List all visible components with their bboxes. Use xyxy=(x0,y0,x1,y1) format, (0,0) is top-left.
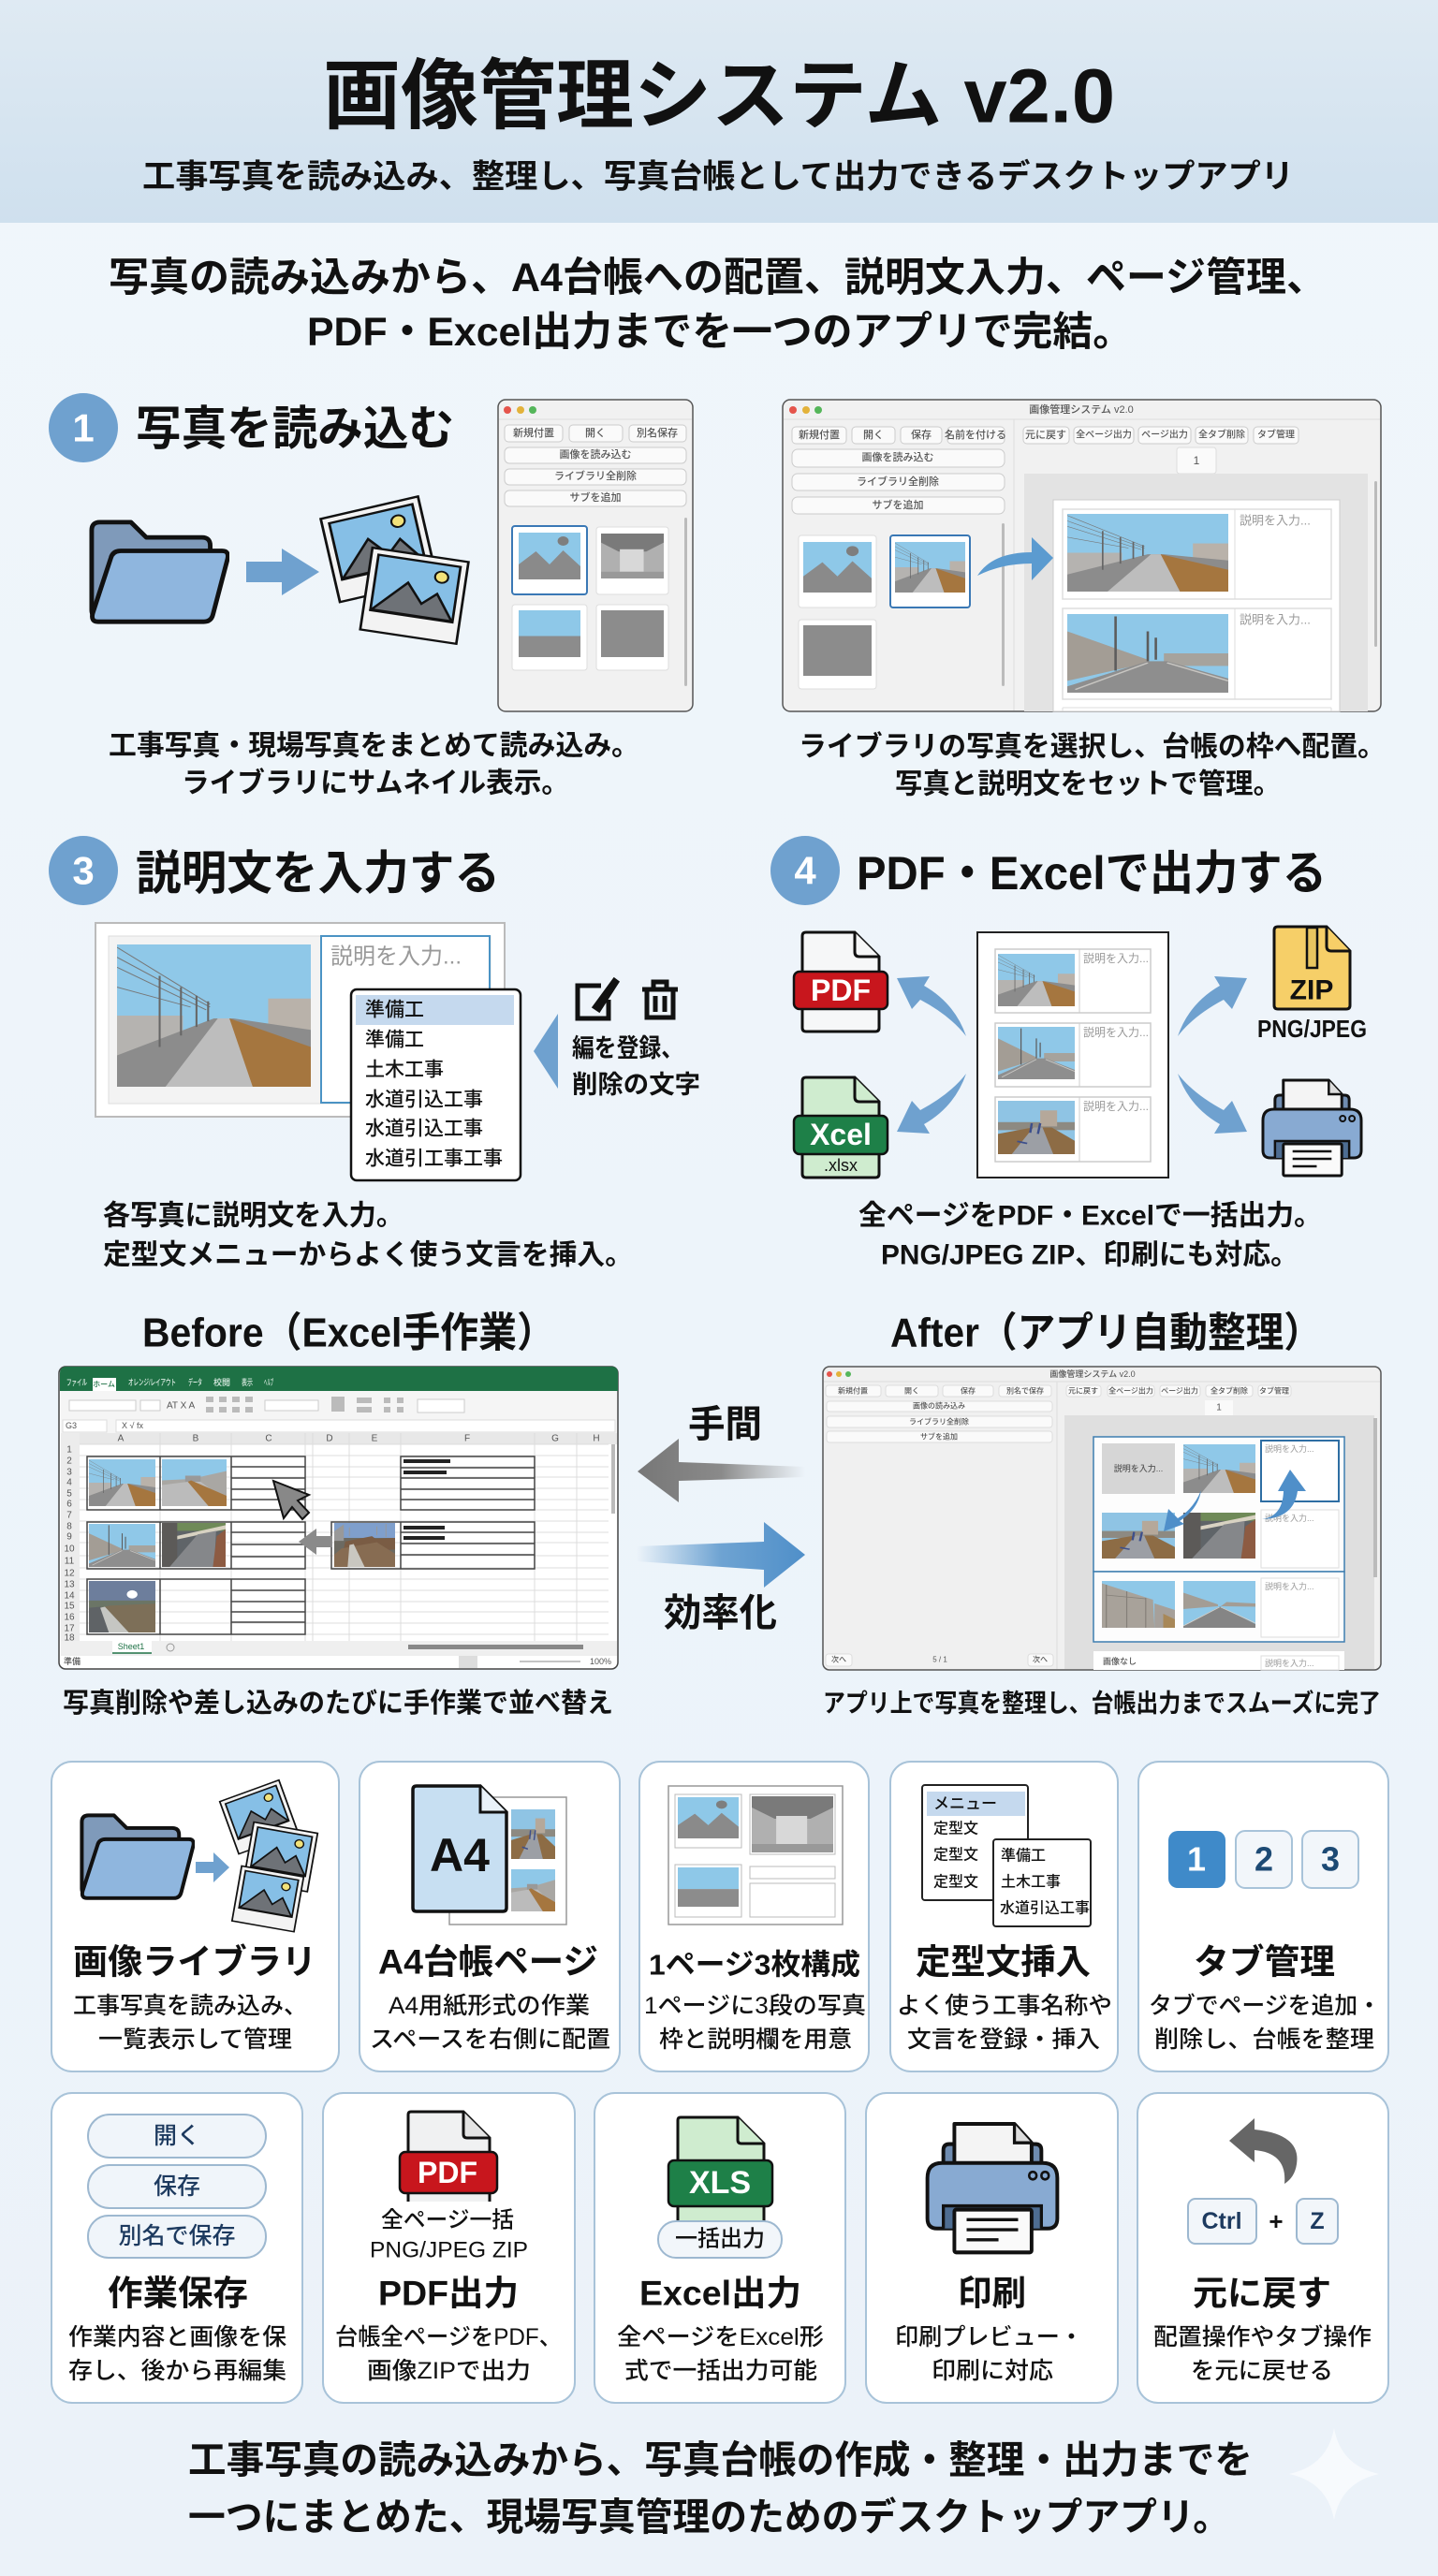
icon: printer xyxy=(928,2124,1057,2252)
app window: library: サブを追加 xyxy=(569,490,622,504)
footer text: 一つにまとめた、現場写真管理のためのデスクトップアプリ。 xyxy=(188,2496,1230,2539)
arrow: insert photo xyxy=(299,1529,332,1555)
icon: folder and photos xyxy=(81,1780,317,1932)
ledger page: 説明を入力... xyxy=(1083,951,1149,965)
step 1 section xyxy=(49,393,693,799)
After app window: 画像管理システム v2.0 xyxy=(1049,1368,1136,1379)
card: tab management: タブでページを追加・ xyxy=(1149,1993,1381,2019)
step 4 heading: PDF・Excelで出力する xyxy=(857,847,1327,900)
After heading: After（アプリ自動整理） xyxy=(890,1310,1322,1355)
Excel window mockup: 1 xyxy=(66,1445,72,1455)
card: A4 ledger page: スペースを右側に配置 xyxy=(370,2027,610,2053)
After app window: 説明を入力... xyxy=(1114,1463,1163,1473)
icon: numbered tabs: 2 xyxy=(1255,1840,1273,1878)
icon: A4 page: A4 xyxy=(430,1829,490,1881)
card: undo xyxy=(1137,2093,1388,2403)
card: phrase insert: 定型文挿入 xyxy=(916,1943,1091,1981)
card: phrase insert xyxy=(890,1762,1118,2071)
card: three per page: 枠と説明欄を用意 xyxy=(659,2027,852,2053)
icon: save buttons: 別名で保存 xyxy=(118,2223,236,2249)
Excel window mockup: オレンジ/レイアウト xyxy=(128,1378,176,1387)
step 4 badge xyxy=(770,836,840,905)
ledger row mockup: 説明を入力... xyxy=(330,944,462,970)
Excel window mockup: 11 xyxy=(65,1556,75,1567)
icon: XLS xyxy=(658,2117,782,2258)
arrow: folder to photos xyxy=(246,549,319,595)
card: tab management: 削除し、台帳を整理 xyxy=(1154,2027,1374,2053)
Excel window mockup: 9 xyxy=(66,1531,72,1543)
arrow: library to ledger xyxy=(977,537,1053,580)
Excel window mockup: F xyxy=(464,1434,470,1443)
icon: PDF xyxy=(400,2112,497,2202)
icon: menus: 準備工 xyxy=(1001,1848,1046,1865)
Excel window mockup: 15 xyxy=(64,1601,75,1612)
step 3 caption xyxy=(103,1200,633,1271)
edit note xyxy=(572,1034,700,1099)
step 1 badge: 1 xyxy=(72,406,95,449)
Excel window mockup: ヘルプ xyxy=(264,1378,273,1387)
icon: XLS: XLS xyxy=(689,2165,751,2201)
card: phrase insert: 文言を登録・挿入 xyxy=(907,2027,1100,2053)
icon: XLS: 一括出力 xyxy=(675,2226,765,2252)
After app window: 開く xyxy=(904,1387,919,1395)
Excel window mockup: A xyxy=(118,1434,125,1443)
icon: cursor xyxy=(273,1481,309,1519)
Before heading: Before（Excel手作業） xyxy=(142,1310,555,1355)
icon: Excel file: Xcel xyxy=(810,1118,872,1151)
step 1 heading: 写真を読み込む xyxy=(136,402,454,455)
After app window: 説明を入力... xyxy=(1265,1443,1314,1454)
PNG/JPEG label: PNG/JPEG xyxy=(1257,1015,1367,1043)
edit note: 編を登録、 xyxy=(572,1034,683,1062)
step 2 caption: 写真と説明文をセットで管理。 xyxy=(895,769,1281,799)
ledger page xyxy=(977,932,1168,1178)
card: Excel output xyxy=(594,2093,845,2403)
Excel window mockup: 2 xyxy=(66,1456,72,1466)
Excel window mockup: 14 xyxy=(64,1591,75,1601)
icon: save buttons xyxy=(88,2115,266,2258)
step 1 caption: ライブラリにサムネイル表示。 xyxy=(182,768,569,799)
card: print: 印刷 xyxy=(958,2275,1026,2312)
icon: numbered tabs xyxy=(1168,1831,1358,1888)
Excel window mockup: 6 xyxy=(66,1500,72,1509)
icon: menus: 定型文 xyxy=(933,1846,978,1863)
step 2 app window: ledger layout: 全タブ削除 xyxy=(1198,429,1245,440)
icon: printer xyxy=(1263,1080,1361,1176)
After app window: 説明を入力... xyxy=(1265,1658,1314,1668)
card: phrase insert: よく使う工事名称や xyxy=(897,1993,1112,2019)
app window: library: 画像を読み込む xyxy=(560,447,631,461)
keys: Ctrl + Z xyxy=(1188,2199,1338,2244)
Excel window mockup: 17 xyxy=(64,1623,75,1634)
Excel window mockup: 5 xyxy=(66,1488,72,1500)
icon: menus: 定型文 xyxy=(933,1820,978,1837)
card: Excel output: 式で一括出力可能 xyxy=(624,2358,817,2384)
card: image library: 工事写真を読み込み、 xyxy=(73,1993,307,2019)
After app window: 1 xyxy=(1216,1402,1222,1413)
After app window: 元に戻す xyxy=(1068,1387,1098,1395)
After app window: 説明を入力... xyxy=(1265,1581,1314,1591)
Excel window mockup: 10 xyxy=(64,1544,75,1554)
Excel window mockup: D xyxy=(326,1434,333,1443)
card: undo: 配置操作やタブ操作 xyxy=(1153,2324,1372,2350)
Excel window mockup: G3 xyxy=(66,1421,77,1430)
After app window: 説明を入力... xyxy=(1265,1513,1314,1523)
After app window: サブを追加 xyxy=(920,1432,958,1442)
icon: page layout xyxy=(668,1786,843,1925)
icon: numbered tabs: 1 xyxy=(1187,1840,1206,1878)
Excel window mockup: ホーム xyxy=(93,1380,115,1389)
card: undo: を元に戻せる xyxy=(1191,2358,1333,2384)
app window: library xyxy=(498,400,693,711)
step 3 caption: 定型文メニューからよく使う文言を挿入。 xyxy=(103,1239,633,1271)
step 3 section xyxy=(49,836,700,1271)
dropdown menu of phrases: 準備工 xyxy=(365,1030,424,1050)
icon: PDF file xyxy=(794,932,888,1032)
After app window: 次へ xyxy=(1033,1655,1048,1664)
icon: menus: メニュー xyxy=(933,1795,997,1812)
After app window: 5 / 1 xyxy=(932,1655,947,1664)
After app window: 保存 xyxy=(961,1385,976,1395)
card: A4 ledger page: A4台帳ページ xyxy=(378,1943,598,1981)
step 2 app window: ledger layout: 保存 xyxy=(911,428,932,441)
step 2 app window: ledger layout: 新規付置 xyxy=(799,428,840,441)
keys: Ctrl + Z: Z xyxy=(1310,2208,1325,2234)
step 2 app window: ledger layout xyxy=(783,400,1381,711)
step 2 app window: ledger layout: 画像管理システム v2.0 xyxy=(1029,402,1134,416)
ledger page: 説明を入力... xyxy=(1083,1099,1149,1113)
icon: menus: 定型文 xyxy=(933,1874,978,1891)
icon: save buttons: 保存 xyxy=(154,2174,200,2200)
header band xyxy=(0,0,1438,223)
intro text: 写真の読み込みから、A4台帳への配置、説明文入力、ページ管理、 xyxy=(109,256,1327,300)
icon: ZIP file: ZIP xyxy=(1290,975,1333,1005)
card: three per page xyxy=(639,1762,869,2071)
arrow: to menu xyxy=(534,1014,558,1089)
arrow: efficiency xyxy=(637,1522,805,1588)
After app window: タブ管理 xyxy=(1259,1385,1289,1395)
icon: trash xyxy=(642,982,678,1017)
edit note: 削除の文字 xyxy=(572,1071,700,1099)
label: efficiency: 効率化 xyxy=(664,1591,777,1634)
icon: photos xyxy=(321,496,468,644)
step 1 caption xyxy=(109,730,639,799)
card: A4 ledger page xyxy=(360,1762,620,2071)
Excel window mockup: 準備 xyxy=(64,1656,81,1666)
icon: Excel file: .xlsx xyxy=(824,1156,858,1175)
app window: library: 開く xyxy=(585,427,606,439)
step 4 caption: 全ページをPDF・Excelで一括出力。 xyxy=(858,1200,1322,1232)
step 2 app window: ledger layout: 1 xyxy=(1194,454,1200,467)
step 2 app window: ledger layout: 元に戻す xyxy=(1025,429,1066,441)
step 2 app window: ledger layout: 開く xyxy=(863,429,884,441)
step 3 heading: 説明文を入力する xyxy=(136,847,500,900)
After app window: 次へ xyxy=(831,1655,846,1664)
Excel window mockup: 3 xyxy=(66,1468,72,1477)
ledger row mockup xyxy=(95,923,505,1117)
card: Excel output: Excel出力 xyxy=(639,2275,801,2312)
Excel window mockup: 100% xyxy=(590,1657,611,1666)
card: image library xyxy=(51,1762,339,2071)
sparkle decoration xyxy=(1289,2428,1379,2520)
step 2 app window: ledger layout: 名前を付ける xyxy=(945,428,1006,441)
intro text xyxy=(109,256,1327,355)
Excel window mockup: 表示 xyxy=(242,1377,253,1387)
card: PDF output: PNG/JPEG ZIP xyxy=(370,2237,528,2263)
step 4 section xyxy=(770,836,1367,1271)
step 4 badge: 4 xyxy=(794,848,816,893)
Excel window mockup: Sheet1 xyxy=(118,1642,144,1651)
card: three per page: 1ページに3段の写真 xyxy=(644,1993,866,2019)
card: print: 印刷プレビュー・ xyxy=(895,2324,1083,2350)
icon: edit xyxy=(578,979,618,1018)
step 4 caption: PNG/JPEG ZIP、印刷にも対応。 xyxy=(881,1239,1299,1271)
footer text: 工事写真の読み込みから、写真台帳の作成・整理・出力までを xyxy=(188,2438,1253,2481)
After caption: アプリ上で写真を整理し、台帳出力までスムーズに完了 xyxy=(823,1689,1381,1718)
After app window: 画像なし xyxy=(1103,1656,1137,1666)
Excel window mockup xyxy=(59,1367,618,1669)
card: A4 ledger page: A4用紙形式の作業 xyxy=(389,1993,590,2019)
step 2 caption xyxy=(799,730,1386,799)
icon: folder xyxy=(92,522,227,622)
step 3 badge xyxy=(49,836,118,905)
Excel window mockup: 18 xyxy=(64,1632,75,1644)
card: PDF output: 全ページ一括 xyxy=(381,2207,514,2233)
Excel window mockup: データ xyxy=(188,1377,202,1387)
arrows: rearrange photos xyxy=(1164,1470,1306,1531)
footer text xyxy=(188,2438,1253,2539)
dropdown menu of phrases: 土木工事 xyxy=(365,1060,444,1080)
title: 画像管理システム v2.0 xyxy=(323,54,1115,139)
Excel window mockup: X √ fx xyxy=(122,1421,143,1430)
After app window: 画像の読み込み xyxy=(913,1400,965,1410)
dropdown menu of phrases: 準備工 xyxy=(365,1000,424,1020)
After app window: 全タブ削除 xyxy=(1211,1385,1248,1395)
Excel window mockup: 8 xyxy=(66,1522,72,1531)
icon: save buttons: 開く xyxy=(154,2123,200,2149)
card: three per page: 1ページ3枚構成 xyxy=(649,1949,860,1981)
Excel window mockup: 校閲 xyxy=(213,1377,230,1387)
intro text: PDF・Excel出力までを一つのアプリで完結。 xyxy=(307,310,1133,355)
step 1 caption: 工事写真・現場写真をまとめて読み込み。 xyxy=(109,730,639,762)
Excel window mockup: 4 xyxy=(66,1477,72,1488)
step 1 badge xyxy=(49,393,118,462)
card: save work: 存し、後から再編集 xyxy=(68,2358,286,2384)
card: PDF output: PDF出力 xyxy=(378,2275,519,2312)
step 3 badge: 3 xyxy=(72,848,95,893)
After app window xyxy=(823,1367,1381,1670)
keys: Ctrl + Z: + xyxy=(1269,2207,1284,2235)
dropdown menu of phrases: 水道引工事工事 xyxy=(365,1148,503,1170)
dropdown menu of phrases xyxy=(351,989,521,1180)
label: manual effort: 手間 xyxy=(688,1404,762,1445)
card: PDF output: 台帳全ページをPDF、 xyxy=(335,2324,562,2350)
Before caption: 写真削除や差し込みのたびに手作業で並べ替え xyxy=(63,1688,613,1719)
Excel window mockup: 7 xyxy=(66,1511,72,1520)
app window: library: ライブラリ全削除 xyxy=(554,469,637,482)
card: image library: 画像ライブラリ xyxy=(73,1941,316,1981)
step 2 app window: ledger layout: 説明を入力... xyxy=(1240,612,1311,627)
step 2 app window: ledger layout: タブ管理 xyxy=(1257,429,1295,440)
After app window: ページ出力 xyxy=(1161,1385,1198,1395)
ledger page: 説明を入力... xyxy=(1083,1025,1149,1039)
Excel window mockup: E xyxy=(372,1434,378,1443)
After app window: 新規付置 xyxy=(838,1385,868,1395)
step 2 app window: ledger layout: 画像を読み込む xyxy=(861,450,934,463)
arrow: manual effort xyxy=(638,1439,805,1502)
card: tab management: タブ管理 xyxy=(1194,1941,1335,1981)
Excel window mockup: 12 xyxy=(64,1569,75,1578)
Excel window mockup: ファイル xyxy=(66,1378,87,1387)
After app window: 別名で保存 xyxy=(1006,1385,1044,1395)
card: save work xyxy=(51,2093,302,2403)
Excel window mockup: 16 xyxy=(64,1612,75,1623)
app window: library: 別名保存 xyxy=(637,426,678,439)
app window: library: 新規付置 xyxy=(513,426,554,439)
icon: Excel file xyxy=(794,1077,888,1178)
step 2 app window: ledger layout: サブを追加 xyxy=(873,498,923,511)
Excel window mockup: B xyxy=(193,1434,199,1443)
subtitle: 工事写真を読み込み、整理し、写真台帳として出力できるデスクトップアプリ xyxy=(142,157,1294,195)
icon: menus: 水道引込工事 xyxy=(1000,1900,1090,1917)
icon: numbered tabs: 3 xyxy=(1321,1840,1340,1878)
step 2 app window: ledger layout: ライブラリ全削除 xyxy=(857,475,939,488)
step 4 caption xyxy=(858,1200,1322,1271)
step 2 app window: ledger layout: ページ出力 xyxy=(1141,429,1188,440)
Excel window mockup: C xyxy=(265,1434,272,1443)
icon: menus: 土木工事 xyxy=(1001,1874,1061,1891)
icon: PDF file: PDF xyxy=(811,973,871,1007)
arrows from ledger to outputs xyxy=(897,976,1247,1134)
dropdown menu of phrases: 水道引込工事 xyxy=(365,1118,483,1140)
card: PDF output: 画像ZIPで出力 xyxy=(367,2358,531,2384)
icon: A4 page xyxy=(413,1786,566,1925)
icon: PDF: PDF xyxy=(418,2156,477,2189)
step 2 app window: ledger layout: 説明を入力... xyxy=(1240,513,1311,528)
Excel window mockup: H xyxy=(593,1434,600,1443)
card: save work: 作業保存 xyxy=(108,2275,248,2312)
icon: ZIP file xyxy=(1274,927,1350,1009)
step 3 caption: 各写真に説明文を入力。 xyxy=(103,1200,404,1232)
step 2 caption: ライブラリの写真を選択し、台帳の枠へ配置。 xyxy=(799,730,1386,762)
Excel window mockup: 13 xyxy=(64,1580,75,1589)
keys: Ctrl + Z: Ctrl xyxy=(1201,2208,1242,2234)
After app window: 全ページ出力 xyxy=(1108,1385,1153,1395)
step 2 app window: ledger layout: 全ページ出力 xyxy=(1076,429,1132,440)
After app window: ライブラリ全削除 xyxy=(909,1417,969,1427)
card: undo: 元に戻す xyxy=(1193,2275,1331,2312)
dropdown menu of phrases: 水道引込工事 xyxy=(365,1090,483,1110)
card: print: 印刷に対応 xyxy=(932,2358,1053,2384)
Excel window mockup: ΑΤ Χ Α xyxy=(167,1400,196,1412)
icon: menus xyxy=(922,1785,1091,1926)
Excel window mockup: G xyxy=(551,1434,559,1443)
icon: undo arrow xyxy=(1229,2118,1297,2184)
card: print xyxy=(866,2093,1118,2403)
card: save work: 作業内容と画像を保 xyxy=(68,2324,286,2350)
card: Excel output: 全ページをExcel形 xyxy=(617,2324,824,2350)
card: PDF output xyxy=(323,2093,575,2403)
card: image library: 一覧表示して管理 xyxy=(98,2027,292,2053)
card: tab management xyxy=(1138,1762,1388,2071)
